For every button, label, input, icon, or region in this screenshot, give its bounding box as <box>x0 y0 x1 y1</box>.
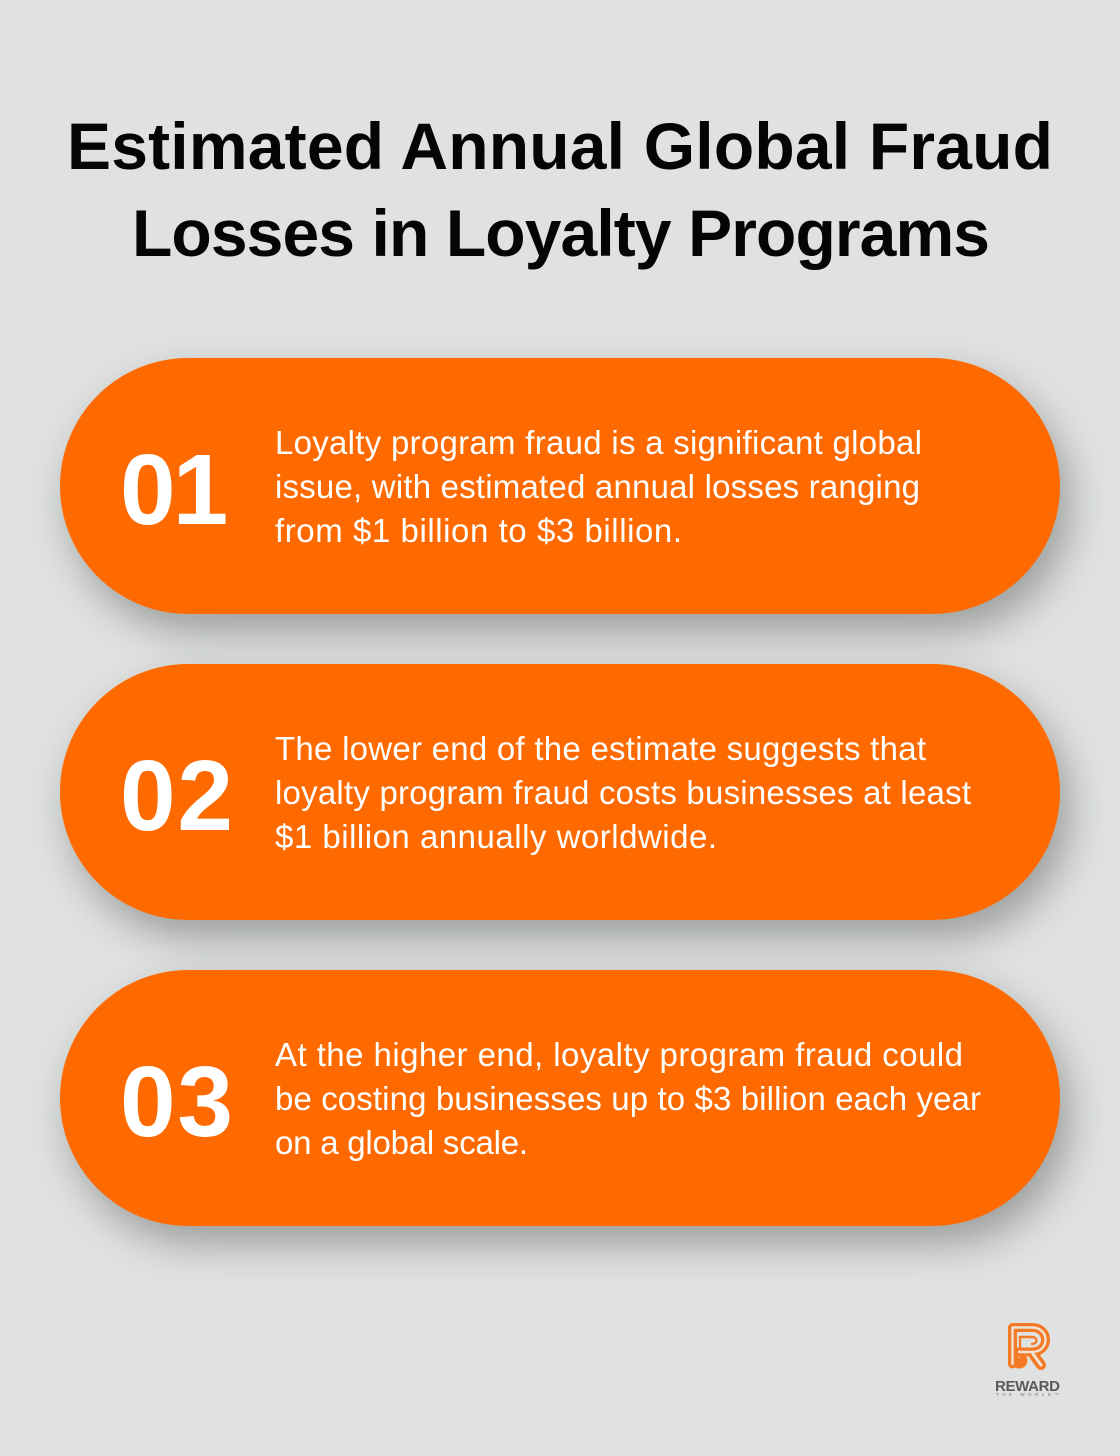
wordmark: REWARD <box>995 1378 1060 1395</box>
title: Estimated Annual Global Fraud <box>67 109 1053 183</box>
text block 1 <box>275 424 922 549</box>
text block 3: on a global scale. <box>275 1124 528 1161</box>
title: Losses in Loyalty Programs <box>132 196 990 270</box>
panel: card 2 background <box>60 664 1060 920</box>
text block 2 <box>275 730 971 855</box>
text block 2: The lower end of the estimate suggests that <box>275 730 926 767</box>
text block 3: At the higher end, loyalty program fraud could <box>275 1036 963 1073</box>
text block 3 <box>275 1036 981 1161</box>
number 02: 02 <box>120 740 233 852</box>
panel: card 1 background <box>60 358 1060 614</box>
text block 3: be costing businesses up to $3 billion each year <box>275 1080 981 1117</box>
text block 2: $1 billion annually worldwide. <box>275 818 717 855</box>
text block 1: issue, with estimated annual losses ranging <box>275 468 920 505</box>
text block 1: Loyalty program fraud is a significant global <box>275 424 922 461</box>
icon: R mark <box>1012 1328 1046 1365</box>
text block 1: from $1 billion to $3 billion. <box>275 512 682 549</box>
panel: card 3 background <box>60 970 1060 1226</box>
title <box>67 109 1053 270</box>
number 01: 01 <box>120 434 228 546</box>
tagline: THE WORLD™ <box>996 1392 1059 1397</box>
number 03: 03 <box>120 1046 233 1158</box>
text block 2: loyalty program fraud costs businesses at least <box>275 774 971 811</box>
logo: Reward the World <box>995 1328 1060 1397</box>
